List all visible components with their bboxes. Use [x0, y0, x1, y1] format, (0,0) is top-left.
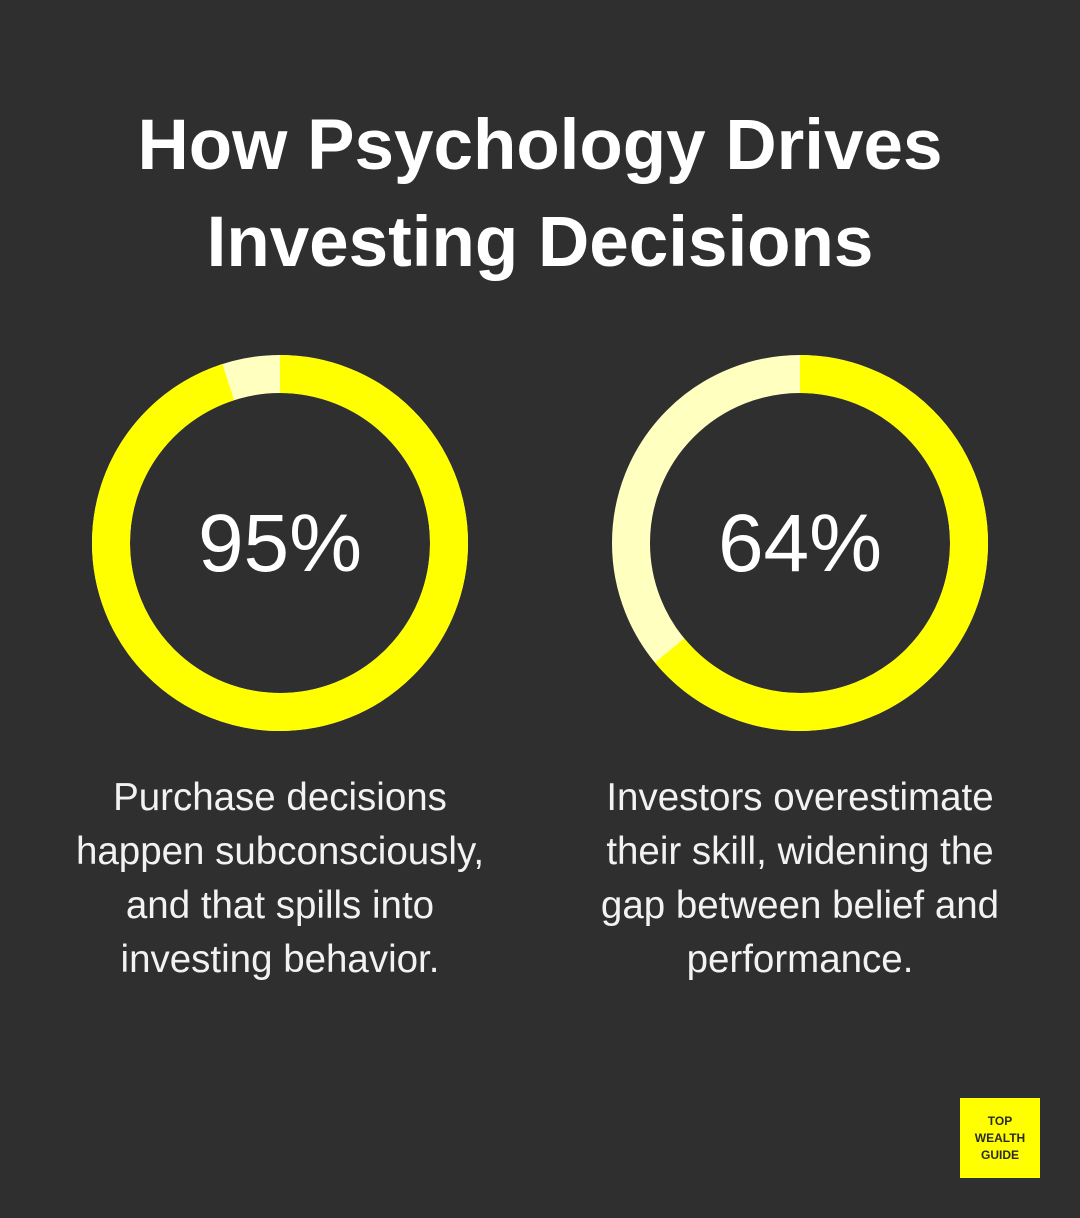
caption: 64%: their skill, widening the	[606, 830, 994, 873]
caption: 95%: investing behavior.	[121, 938, 439, 981]
title: How Psychology Drives	[138, 106, 942, 185]
caption: 64%	[601, 776, 999, 981]
logo: TOP	[988, 1114, 1012, 1128]
caption: 95%: Purchase decisions	[113, 776, 447, 819]
donut chart: 95%: 95%	[198, 498, 362, 589]
logo: GUIDE	[981, 1148, 1019, 1162]
caption: 95%: and that spills into	[126, 884, 434, 927]
title	[138, 106, 942, 282]
donut chart: 95%	[92, 355, 468, 731]
logo: WEALTH	[975, 1130, 1025, 1144]
logo	[960, 1098, 1040, 1178]
caption: 64%: Investors overestimate	[606, 776, 994, 819]
donut chart: 64%: 64%	[718, 498, 882, 589]
caption: 64%: performance.	[687, 938, 913, 981]
caption: 95%: happen subconsciously,	[76, 830, 484, 873]
title: Investing Decisions	[207, 203, 873, 282]
caption: 64%: gap between belief and	[601, 884, 999, 927]
caption: 95%	[76, 776, 484, 981]
donut chart: 64%	[612, 355, 988, 731]
